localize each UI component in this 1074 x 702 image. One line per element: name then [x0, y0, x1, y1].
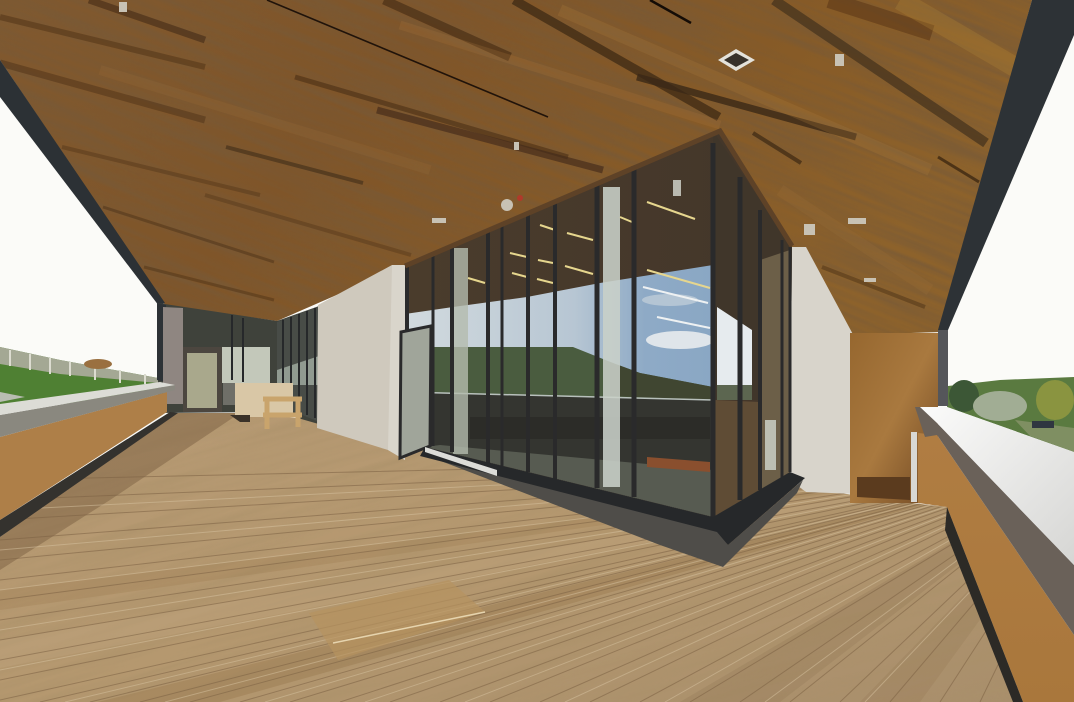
right pane reflection — [792, 246, 793, 300]
interior — [430, 394, 710, 516]
railing: right timber balustrade — [915, 407, 1074, 702]
ceiling: timber soffit — [0, 0, 1032, 335]
white columns — [453, 248, 468, 454]
landscape: left hillside — [0, 347, 158, 412]
column: right post — [938, 330, 948, 406]
wall: vertical timber — [850, 333, 938, 503]
ceiling fixture: small lights — [119, 2, 876, 282]
wall: white pipe — [911, 432, 917, 502]
pavilion: stone base — [420, 453, 803, 567]
floor: timber deck — [0, 413, 1074, 702]
wall: right pale cladding — [790, 247, 856, 494]
interior lights — [468, 202, 710, 288]
ceiling fixture: square vent — [718, 49, 755, 71]
wall: pale cladding — [317, 265, 405, 460]
furniture: counter and bench — [230, 383, 302, 429]
deck dark boards — [99, 503, 924, 702]
pavilion: roof edge — [405, 131, 792, 266]
pavilion: glass facade — [400, 130, 800, 530]
back wall: entrance glazing — [157, 303, 322, 425]
fascia: left dark edge — [0, 60, 165, 306]
entrance door — [183, 347, 222, 412]
deck rail shadow — [0, 413, 240, 570]
pavilion: white strip at base — [425, 447, 497, 476]
pavilion: dark ledge — [420, 447, 805, 545]
wall: pale cladding edge — [388, 265, 405, 460]
landscape: right trees and lawn — [947, 377, 1074, 452]
pavilion: mullions — [407, 143, 790, 517]
deck repair patch — [309, 580, 485, 660]
reflected hill — [434, 347, 710, 398]
pavilion: side door — [400, 326, 431, 458]
fascia: right dark edge — [938, 0, 1074, 330]
reflected sky — [409, 265, 710, 386]
railing: left timber balustrade — [0, 382, 178, 537]
